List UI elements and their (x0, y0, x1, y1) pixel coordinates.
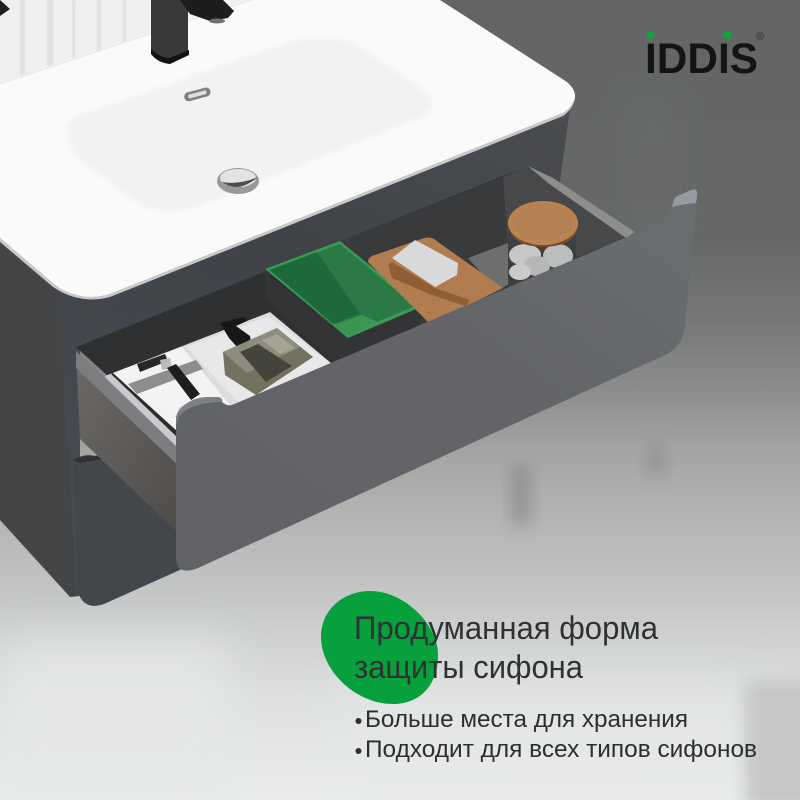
registered mark: ® (756, 31, 764, 43)
near side rail (76, 351, 177, 464)
bullet list: Подходит для всех типов сифонов (365, 736, 757, 763)
inner side wall (503, 166, 626, 280)
near side panel (77, 369, 178, 533)
black faucet (0, 0, 234, 64)
heading: Продуманная форма (354, 610, 658, 646)
green organizer box (265, 241, 422, 362)
brand logo IDDIS: IDDIS (645, 35, 758, 83)
cabinet lower body (0, 236, 182, 606)
second towel (186, 316, 330, 404)
glass jar with wooden lid (508, 201, 578, 290)
wooden tray with hair brush (368, 238, 503, 324)
side of cabinet (0, 236, 80, 597)
back wall panels (0, 0, 252, 84)
green accent blob (321, 591, 438, 704)
drain (217, 168, 259, 194)
drawer right cap (672, 189, 697, 207)
drawer front panel (176, 189, 697, 571)
lower drawer seam (73, 455, 103, 463)
front post (62, 290, 80, 596)
razor (137, 354, 200, 400)
far side rail (528, 166, 635, 238)
brush handle (388, 262, 470, 306)
sink bowl (68, 37, 431, 211)
drawer floor (468, 243, 511, 291)
brush bristles (392, 240, 458, 287)
towel (113, 347, 230, 431)
overflow hole (183, 87, 212, 102)
drawer left cap (176, 397, 222, 426)
lower drawer front (73, 455, 182, 606)
soap dispenser (220, 317, 313, 395)
back wall of drawer (76, 166, 626, 440)
heading (354, 610, 658, 685)
towel tray with razor (105, 312, 331, 447)
heading: защиты сифона (354, 649, 583, 685)
tray frame (105, 374, 177, 447)
cabinet upper band (62, 108, 570, 445)
white countertop basin (0, 0, 575, 299)
logo green dots (646, 31, 732, 39)
bullet list: Больше места для хранения (365, 706, 688, 733)
bullet list (356, 706, 757, 763)
drawer interior (76, 166, 635, 533)
